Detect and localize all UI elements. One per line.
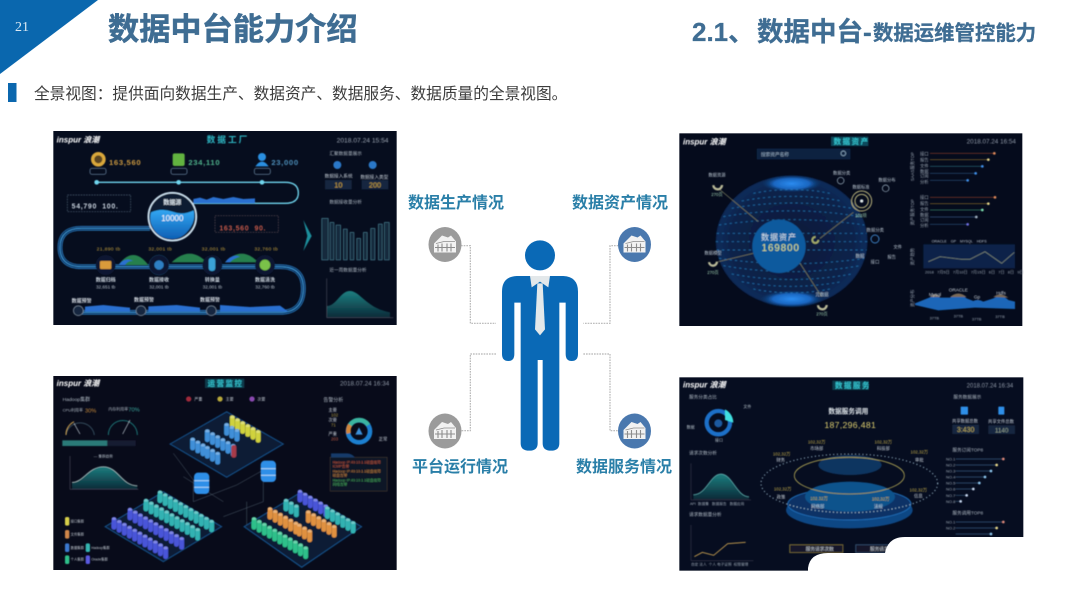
- alert ring: 告警分析: [323, 397, 343, 404]
- stage labels: 信息: [914, 493, 923, 500]
- request volume chart: 自定 法人 个人 电子证照 权限管理: [691, 562, 749, 567]
- TOP rankings: 服务调用TOP8: [952, 510, 983, 517]
- panel: data assets dashboard: 订阅: [920, 216, 929, 223]
- icon: platform: [428, 414, 462, 448]
- panel: data assets dashboard: 分析: [920, 178, 929, 185]
- central stage: 数据服务调用: [828, 407, 868, 416]
- warning nodes: 数据预警: [200, 297, 220, 304]
- right column charts: 近一周数据量分析: [329, 267, 367, 274]
- person figure: [502, 240, 578, 451]
- corner page badge: 21: [15, 20, 29, 35]
- dashboard header: 数据服务: [835, 381, 871, 390]
- platform: top rack: [170, 412, 283, 477]
- search bar: [757, 149, 850, 159]
- alert ring: 严重: [328, 430, 338, 437]
- search bar: 搜索资产名称: [761, 151, 789, 158]
- process nodes: [96, 246, 278, 289]
- legend: [65, 517, 110, 564]
- intro text: 全景视图：提供面向数据生产、数据资产、数据服务、数据质量的全景视图。: [34, 85, 567, 103]
- alert ring: 正常: [379, 436, 387, 443]
- panel: data assets dashboard: 接口: [920, 151, 929, 158]
- process nodes: 数据归档: [96, 277, 116, 284]
- platform: right rack: [244, 490, 362, 567]
- panel: operations monitoring dashboard: [53, 376, 397, 570]
- alert list: Hadoop IP:49.10.1.1磁盘故障: [333, 468, 381, 473]
- title: 数据中台能力介绍: [108, 12, 358, 47]
- sphere labels: 接口: [871, 258, 879, 265]
- panel: data assets dashboard: 分析: [920, 222, 929, 229]
- asset sphere: 169800: [762, 243, 800, 254]
- dashboard header: 数据工厂: [207, 133, 249, 144]
- TOP rankings: 服务订阅TOP8: [952, 446, 983, 453]
- vertical chart titles: 资产趋势: [909, 247, 916, 265]
- dashboard header: 2018.07.24 16:34: [967, 383, 1014, 389]
- section heading: 数据中台: [757, 17, 863, 47]
- arrow: [303, 220, 312, 251]
- hill shapes: [118, 254, 258, 265]
- right column charts: 数据接入类型: [360, 173, 389, 180]
- trend chart: 2018 7月5日 7月10日 7月15日 6日 7日 8日 9日: [925, 270, 1024, 275]
- pipeline: [60, 180, 303, 312]
- mountain chart: 37TB: [995, 314, 1005, 319]
- TOP rankings: NO.7: [946, 493, 956, 498]
- service ring: 文件: [743, 403, 751, 409]
- vertical chart titles: 资产服务TOP: [909, 199, 916, 225]
- connecting network: [173, 453, 263, 527]
- hadoop gauges: Hadoop集群: [63, 396, 90, 403]
- process nodes: 21,890 tb: [97, 246, 120, 252]
- data pool gauge: 10000: [161, 214, 184, 223]
- alert list: [330, 453, 387, 491]
- stage labels: 政策: [777, 494, 786, 501]
- source icons and totals: 234,110: [188, 158, 220, 167]
- hadoop gauges: 内存利用率: [108, 406, 128, 412]
- dashboard header: inspur 浪潮: [683, 381, 728, 390]
- stage labels: 财务: [776, 457, 786, 464]
- sphere labels: 270页: [711, 192, 723, 198]
- info boxes: [67, 195, 278, 232]
- bottom buttons: 服务请求: [870, 546, 889, 553]
- TOP rankings: NO.1: [946, 457, 956, 462]
- hadoop gauges: 70%: [128, 407, 140, 413]
- bottom buttons: 服务请求次数: [806, 546, 834, 553]
- panel: data assets dashboard: [679, 133, 1024, 326]
- icon: services: [618, 414, 651, 448]
- request count chart: API 数据集 数据报告 数据应用: [690, 501, 745, 506]
- satellite rings: [709, 177, 889, 309]
- service ring: [687, 394, 751, 443]
- service stats: 共享文件总数: [988, 418, 1015, 425]
- right column charts: [322, 150, 393, 318]
- panel: data assets dashboard: 数据: [920, 212, 929, 219]
- stage labels: 审批: [915, 456, 924, 463]
- icon: production: [428, 227, 462, 262]
- process nodes: 32,651 tb: [96, 284, 116, 289]
- TOP rankings: NO.6: [946, 487, 956, 492]
- sphere labels: 数据模型: [704, 249, 722, 256]
- sphere labels: 数据: [856, 252, 865, 259]
- alert ring: 203: [331, 437, 339, 442]
- hadoop gauges: 30%: [85, 408, 96, 414]
- alert list: Hadoop IP:49.10.1.1磁盘故障: [333, 459, 381, 464]
- legend: 接口集群: [71, 519, 85, 524]
- alert list: ICMP告警: [333, 464, 349, 469]
- trend chart: [923, 240, 1024, 275]
- sphere labels: [704, 169, 903, 318]
- stage labels: 102,32万: [872, 497, 890, 503]
- TOP rankings: NO.1: [946, 520, 956, 525]
- TOP rankings: [946, 446, 1005, 535]
- process nodes: 数据接收: [149, 277, 169, 284]
- legend: Hadoop集群: [91, 545, 110, 550]
- dashboard header: 2018.07.24 15:54: [337, 137, 389, 144]
- dashboard header: 运营监控: [208, 379, 244, 388]
- service ring: 服务分类占比: [689, 394, 717, 401]
- mountain chart: 37TB: [954, 313, 963, 318]
- sphere labels: 文件: [893, 243, 903, 250]
- stage labels: 网络部: [811, 503, 825, 510]
- right column charts: 200: [369, 181, 381, 190]
- sphere labels: 270页: [816, 312, 828, 318]
- alert ring: 71: [331, 423, 336, 428]
- TOP rankings: NO.4: [946, 475, 956, 480]
- mountain chart: 37TB: [972, 317, 982, 322]
- sphere labels: 数据分类: [867, 227, 885, 234]
- stage labels: 102,32万: [910, 488, 928, 494]
- dashboard header: inspur 浪潮: [57, 135, 101, 144]
- panel: data assets dashboard: 文件: [920, 206, 929, 213]
- sphere labels: 数据标准: [852, 183, 870, 190]
- mountain chart: ORACLE: [949, 288, 968, 293]
- trend chart: ORACLE GP MYSQL HDFS: [932, 240, 987, 244]
- source icons and totals: [90, 152, 299, 174]
- service stats: 3:430: [957, 427, 975, 434]
- connectors: [461, 246, 618, 431]
- alert ring: 次要: [328, 417, 338, 424]
- asset sphere: [716, 175, 868, 308]
- section heading: -: [863, 17, 872, 47]
- stage labels: 102,32万: [911, 450, 929, 456]
- stage labels: 102,32万: [875, 439, 893, 445]
- TOP rankings: NO.8: [946, 499, 956, 504]
- panel: data services dashboard: [679, 377, 1023, 571]
- asset sphere: 数据资产: [761, 232, 797, 242]
- TOP rankings: NO.2: [946, 463, 956, 468]
- panel: data factory dashboard: [53, 131, 397, 325]
- mountain chart: Mysql: [929, 292, 941, 297]
- hadoop gauges: CPU利用率: [63, 407, 83, 413]
- panel: data assets dashboard: 接口: [920, 194, 929, 201]
- sphere labels: 270页: [707, 270, 719, 276]
- warning nodes: 数据预警: [134, 297, 154, 304]
- stage labels: 市场部: [810, 445, 824, 452]
- sphere labels: 102项: [855, 213, 867, 219]
- traffic sparkline: [85, 197, 288, 312]
- platform: left rack: [105, 490, 222, 562]
- process nodes: 转换量: [205, 277, 220, 284]
- hadoop gauges: [62, 396, 140, 446]
- alert ring: 主要: [328, 407, 338, 414]
- mountain chart: Gp: [974, 295, 981, 300]
- right column charts: 数据接收量分析: [329, 199, 362, 206]
- sphere labels: 数据资源: [708, 171, 726, 178]
- TOP rankings: NO.2: [946, 526, 956, 531]
- severity legend: 严重: [194, 396, 202, 402]
- severity legend: [186, 396, 265, 402]
- mountain chart: 37TB: [930, 315, 939, 320]
- legend: 文件集群: [71, 532, 85, 537]
- legend: Oracle集群: [91, 557, 108, 562]
- collar: [530, 276, 550, 287]
- request count chart: [689, 450, 751, 506]
- process nodes: 32,001 tb: [202, 246, 225, 252]
- legend: 个人集群: [71, 557, 85, 562]
- process nodes: 32,760 tb: [255, 284, 275, 289]
- service stats: 服务数据展示: [953, 394, 982, 401]
- service stats: 共享数据总数: [952, 417, 979, 424]
- vertical chart titles: [909, 152, 916, 307]
- service ring: 数据: [687, 423, 695, 429]
- warning nodes: 数据预警: [72, 297, 92, 304]
- source icons and totals: 23,000: [271, 158, 299, 167]
- ranking bars: [930, 152, 996, 226]
- section heading: 数据运维管控能力: [873, 22, 1036, 45]
- icon: assets: [618, 227, 651, 262]
- service stats: 1140: [995, 427, 1009, 434]
- source icons and totals: 163,560: [109, 158, 141, 167]
- stage labels: 法规: [874, 503, 883, 510]
- info boxes: 54,790 100.: [72, 203, 119, 210]
- panel: data assets dashboard: 订阅: [920, 173, 929, 180]
- service stats: [952, 394, 1015, 434]
- alert ring: [323, 397, 387, 443]
- stage labels: 102,32万: [810, 496, 828, 502]
- right column charts: 10: [334, 181, 342, 190]
- process nodes: 数据清洗: [255, 277, 275, 284]
- TOP rankings: NO.5: [946, 481, 956, 486]
- sphere labels: 数据分类: [833, 169, 851, 176]
- sphere labels: 报告: [887, 253, 897, 260]
- info boxes: 163,560 90.: [219, 225, 266, 232]
- mountain chart: Hdfs: [996, 291, 1006, 296]
- stage labels: 科技部: [877, 445, 890, 452]
- dashboard header: 2018.07.24 16:54: [967, 138, 1016, 145]
- corner page badge: [0, 0, 98, 74]
- label: data assets: 数据资产情况: [572, 193, 668, 212]
- stage labels: [773, 439, 929, 510]
- label: platform operation: 平台运行情况: [412, 457, 508, 476]
- TOP rankings: NO.3: [946, 469, 956, 474]
- mountain chart: [915, 288, 1015, 322]
- panel: data assets dashboard: 报告: [920, 200, 929, 207]
- bottom buttons: [790, 545, 889, 553]
- data pool gauge: [148, 193, 196, 241]
- database cylinders: [194, 461, 276, 494]
- severity legend: 主要: [226, 396, 234, 402]
- panel: data assets dashboard: 数据: [920, 168, 929, 175]
- process nodes: 32,001 tb: [149, 284, 169, 289]
- section heading: 2.1、: [692, 17, 754, 47]
- stage labels: 102,32万: [808, 439, 826, 445]
- tie: [535, 283, 545, 335]
- area chart: — 集群趋势: [94, 454, 113, 459]
- alert list: Hadoop IP:49.10.1.1磁盘故障: [333, 477, 381, 482]
- service ring: 接口: [715, 437, 723, 443]
- panel: data assets dashboard: 报告: [920, 157, 929, 164]
- dashboard header: [683, 137, 1016, 146]
- sphere labels: 元数据: [816, 291, 829, 298]
- label: data production: 数据生产情况: [408, 193, 504, 212]
- process nodes: 32,760 tb: [254, 246, 278, 252]
- stage labels: 102,32万: [773, 451, 791, 457]
- request volume chart: 请求数据量分析: [689, 511, 722, 518]
- dashboard header: 2018.07.24 16:34: [340, 381, 390, 388]
- vertical chart titles: SAAS服务TOP: [909, 152, 916, 181]
- process nodes: 32,001 tb: [203, 284, 222, 289]
- data pool gauge: 数据源: [163, 198, 181, 206]
- severity legend: 次要: [257, 396, 265, 402]
- alert list: 磁盘告警: [333, 473, 348, 478]
- alert ring: 102: [331, 413, 339, 418]
- request count chart: 请求次数分析: [689, 450, 717, 457]
- sphere labels: 数据分布: [878, 177, 896, 184]
- section heading: [692, 17, 1036, 47]
- panel: data assets dashboard: 文件: [920, 162, 929, 169]
- right column charts: 汇聚数据量展示: [329, 150, 362, 157]
- stage labels: 102,32万: [774, 486, 792, 492]
- right column charts: 数据接入系统: [325, 173, 353, 180]
- dashboard header: [57, 379, 390, 388]
- dashboard header: [57, 133, 389, 144]
- central stage: 187,296,481: [824, 420, 876, 430]
- process nodes: 32,001 tb: [148, 246, 172, 252]
- dashboard header: inspur 浪潮: [683, 137, 728, 146]
- area chart: [70, 454, 138, 489]
- vertical chart titles: 资产分布: [909, 289, 916, 307]
- dashboard header: [683, 381, 1014, 390]
- request volume chart: [689, 511, 753, 567]
- label: data services: 数据服务情况: [576, 457, 672, 476]
- legend: 数据集群: [71, 545, 85, 550]
- white overlay at lower right of the services panel: [808, 537, 1030, 572]
- dashboard header: inspur 浪潮: [57, 379, 101, 388]
- alert list: 网络告警: [333, 482, 348, 487]
- warning nodes: [72, 297, 220, 316]
- central stage: [761, 407, 938, 528]
- dashboard header: 数据资产: [834, 137, 870, 146]
